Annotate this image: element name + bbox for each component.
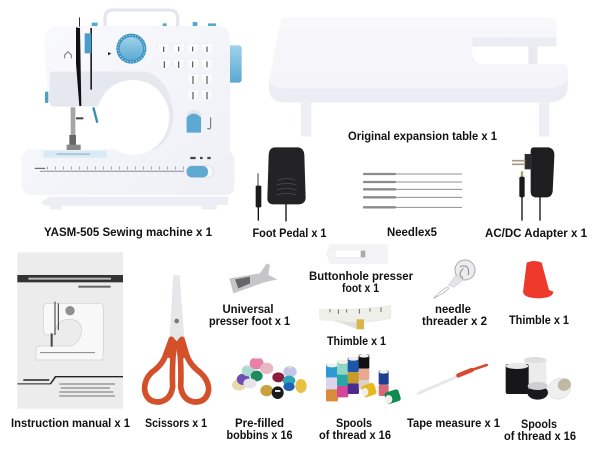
stitch dial xyxy=(116,34,146,64)
left button xyxy=(45,92,48,103)
slot rim xyxy=(472,37,557,47)
label: middle thimble: Thimble x 1 xyxy=(327,336,387,348)
spools of thread black and white xyxy=(506,357,575,403)
label: spools left: Spools xyxy=(336,418,372,430)
black bobbin xyxy=(527,386,548,400)
label: needle threader: needle xyxy=(435,304,471,316)
blades xyxy=(170,276,184,340)
label: spools right: of thread x 16 xyxy=(504,431,576,443)
seam ripper xyxy=(418,365,487,393)
arch lower-left cutout xyxy=(43,107,115,149)
label: spools right: Spools xyxy=(521,419,557,431)
adapter body xyxy=(531,147,554,197)
notes xyxy=(59,384,115,396)
stitch selection panel xyxy=(158,43,213,102)
plug base xyxy=(525,154,532,169)
machine body xyxy=(22,26,234,195)
model band xyxy=(17,376,123,384)
top knobs xyxy=(92,22,216,27)
needle threader xyxy=(433,260,475,298)
expansion table xyxy=(269,17,568,137)
thread guide icon xyxy=(65,52,71,58)
label: sewing machine: YASM-505 Sewing machine x 1 xyxy=(44,227,213,239)
base foot xyxy=(42,197,228,209)
blue lever xyxy=(93,107,97,123)
handle xyxy=(105,10,178,28)
arrow marker xyxy=(108,52,111,55)
cables xyxy=(522,197,540,221)
rear leg xyxy=(528,47,538,65)
prongs xyxy=(512,161,525,164)
cover title xyxy=(28,278,111,280)
label: foot pedal: Foot Pedal x 1 xyxy=(252,228,327,240)
printed machine xyxy=(36,303,103,360)
label: bobbins: Pre-filled xyxy=(235,418,284,430)
pre-filled bobbins xyxy=(232,357,307,399)
pivot xyxy=(174,319,179,323)
power switch xyxy=(187,166,213,177)
label: buttonhole presser foot: Buttonhole presser xyxy=(309,271,414,283)
label: adapter: AC/DC Adapter x 1 xyxy=(485,228,588,240)
pedal ribs xyxy=(277,178,297,195)
side wheel xyxy=(227,45,242,83)
bobbin pile xyxy=(232,357,307,399)
cover xyxy=(17,252,123,409)
label: buttonhole presser foot: foot x 1 xyxy=(342,283,380,295)
needle plate xyxy=(43,151,107,158)
label: universal presser foot: Universal xyxy=(222,304,274,316)
label: manual: Instruction manual x 1 xyxy=(11,418,131,430)
AC/DC adapter xyxy=(512,147,554,221)
yellow spool xyxy=(361,382,377,398)
label: spools left: of thread x 16 xyxy=(319,430,391,442)
white spool xyxy=(524,358,546,388)
tape measure roll xyxy=(319,306,391,329)
spool column 5 xyxy=(379,371,389,385)
thread slots xyxy=(76,27,81,106)
needle and presser foot xyxy=(71,107,75,136)
universal presser foot xyxy=(229,263,277,293)
solid shanks xyxy=(166,338,187,360)
spool column 1 xyxy=(326,364,338,378)
plug xyxy=(255,173,260,186)
sewing machine xyxy=(22,10,242,209)
label: table: Original expansion table x 1 xyxy=(348,131,498,143)
handles xyxy=(145,339,175,402)
foot pedal xyxy=(256,147,306,221)
instruction manual xyxy=(17,252,123,409)
cables xyxy=(258,204,286,221)
pedal body xyxy=(267,147,306,204)
label: tape measure: Tape measure x 1 xyxy=(407,418,501,430)
label: right thimble: Thimble x 1 xyxy=(509,315,570,327)
title bar xyxy=(17,275,123,282)
stitch glyphs xyxy=(164,47,207,99)
arm shade xyxy=(49,72,173,150)
label: universal presser foot: presser foot x 1 xyxy=(209,316,291,328)
white bobbin xyxy=(544,374,575,403)
dc jack xyxy=(518,171,525,177)
black spool xyxy=(506,364,529,394)
spool column 3 xyxy=(348,357,359,372)
table front edge xyxy=(269,75,568,102)
arch opening xyxy=(97,80,169,155)
ruler xyxy=(40,169,184,173)
spool caps xyxy=(326,354,392,404)
spools of thread color xyxy=(326,354,401,405)
label: scissors: Scissors x 1 xyxy=(145,418,208,430)
buttonhole presser foot xyxy=(327,245,387,263)
needles xyxy=(364,174,462,207)
red thimble xyxy=(523,261,553,298)
label: bobbins: bobbins x 16 xyxy=(226,430,292,442)
spool column 2 xyxy=(337,361,348,375)
spool column 4 xyxy=(359,355,369,369)
label: needle threader: threader x 2 xyxy=(422,316,487,328)
reverse lever xyxy=(186,110,201,133)
scissors xyxy=(145,276,209,402)
table top xyxy=(269,17,568,102)
green spool xyxy=(384,389,401,405)
label: needles: Needlex5 xyxy=(387,227,438,239)
bobbin centers xyxy=(246,357,292,392)
table legs xyxy=(301,102,549,137)
